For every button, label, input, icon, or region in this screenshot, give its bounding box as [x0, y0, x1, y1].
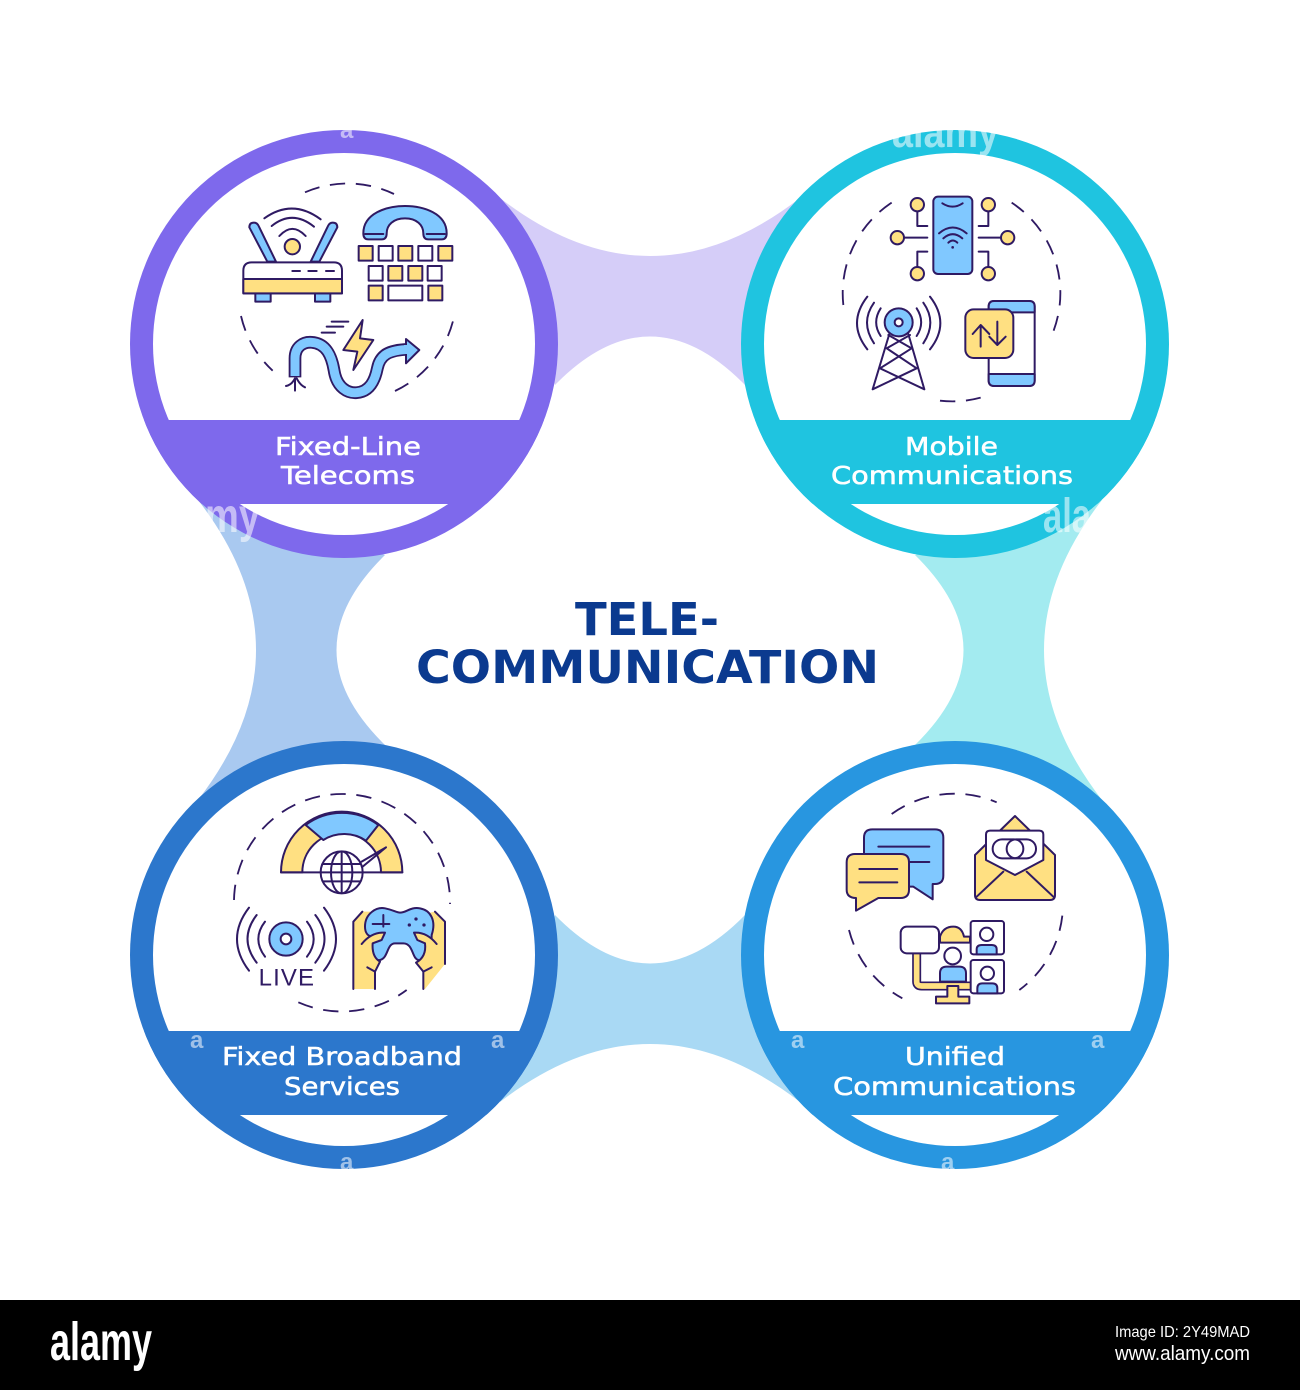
icon: live broadcast: [237, 908, 336, 992]
title: TELE-: [575, 593, 719, 646]
icon: telephone keypad: [359, 206, 452, 300]
icon: router: [243, 209, 342, 302]
watermarks: a: [491, 1027, 505, 1054]
footer url: www.alamy.com: [1114, 1343, 1250, 1365]
watermarks: a: [340, 117, 354, 144]
icon: radio tower: [857, 297, 940, 389]
icon: chat bubbles: [847, 829, 943, 911]
icon: data transfer phone: [965, 301, 1035, 386]
icon: speedometer with globe: [281, 812, 402, 893]
label: Fixed-Line Telecoms: [275, 432, 421, 490]
label: Fixed Broadband Services: [222, 1042, 462, 1101]
label: Fixed Broadband Services: Fixed Broadband: [222, 1042, 462, 1071]
panel: Mobile Communications: [740, 130, 1170, 558]
watermarks: [190, 108, 1105, 1176]
label: Mobile Communications: Mobile: [905, 432, 998, 461]
title: COMMUNICATION: [416, 641, 879, 694]
connector: top purple: [500, 198, 800, 385]
icon group: unified communications: [847, 794, 1062, 1003]
connector: left blue: [198, 500, 385, 800]
dashed ring: [843, 203, 1060, 401]
watermarks: a: [340, 1149, 354, 1176]
panel: Fixed-Line Telecoms: [130, 130, 560, 558]
dashed ring: [234, 794, 450, 1011]
watermarks: a: [190, 1027, 204, 1054]
label: Unified Communications: Unified: [905, 1042, 1005, 1071]
watermarks: a: [1091, 1027, 1105, 1054]
dashed ring: [849, 794, 1062, 998]
icon: smartphone with network nodes: [891, 197, 1014, 280]
panel: Unified Communications: [740, 741, 1170, 1169]
dashed ring: [241, 183, 455, 391]
icon: live broadcast: LIVE: [259, 965, 314, 992]
icon group: fixed-line: [241, 183, 455, 393]
icon: cable with lightning: [286, 320, 419, 393]
panel: Fixed Broadband Services: [130, 741, 560, 1169]
watermarks: ala: [1043, 490, 1091, 543]
watermarks: a: [941, 1149, 955, 1176]
footer logo: alamy: [50, 1312, 152, 1372]
label: Fixed-Line Telecoms: Telecoms: [280, 461, 415, 490]
title: [416, 593, 879, 694]
connector: right cyan: [915, 500, 1102, 800]
footer bar: [0, 1300, 1300, 1390]
watermarks: a: [791, 1027, 805, 1054]
watermarks: my: [205, 490, 260, 543]
watermarks: alamy: [892, 108, 999, 157]
connector: bottom light blue: [500, 915, 800, 1102]
label: Mobile Communications: [831, 432, 1073, 490]
label: Unified Communications: [833, 1042, 1076, 1101]
label: Mobile Communications: Communications: [831, 461, 1073, 490]
icon group: mobile: [843, 197, 1060, 401]
icon: open envelope with link: [975, 816, 1055, 900]
icon group: broadband: [234, 794, 450, 1011]
label: Fixed-Line Telecoms: Fixed-Line: [275, 432, 421, 461]
footer image id: Image ID: 2Y49MAD: [1115, 1324, 1250, 1341]
label: Unified Communications: Communications: [833, 1072, 1076, 1101]
label: Fixed Broadband Services: Services: [284, 1072, 400, 1101]
icon: video conference: [901, 921, 1004, 1003]
icon: gamepad in hands: [353, 908, 445, 989]
